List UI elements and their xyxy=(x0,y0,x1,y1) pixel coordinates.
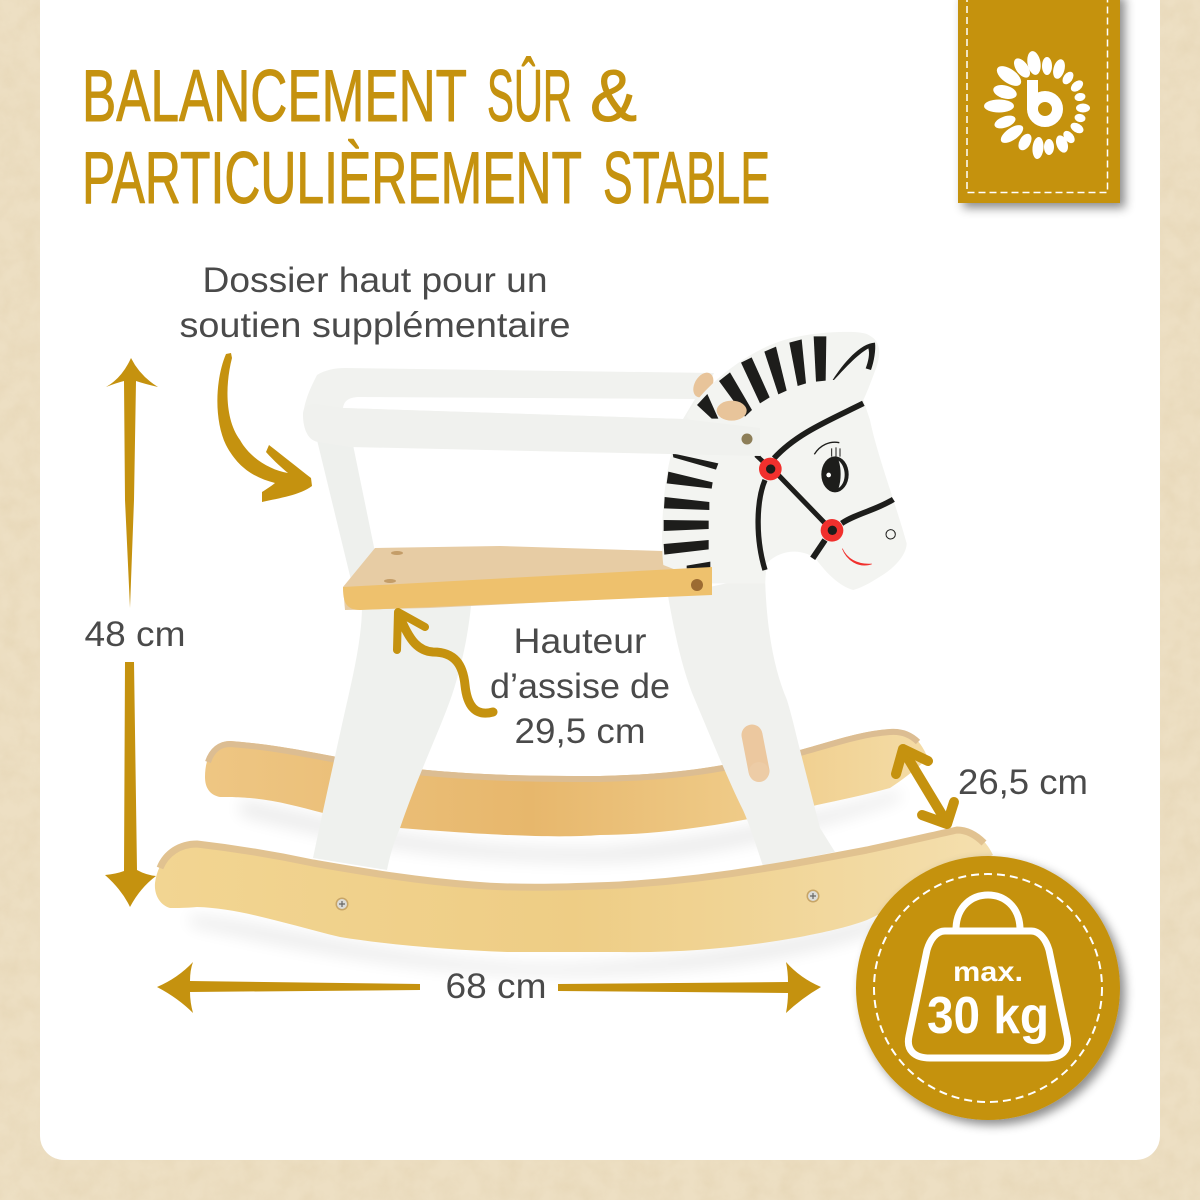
lower mane stripes xyxy=(664,453,718,568)
back rocker xyxy=(205,729,928,836)
badge text xyxy=(927,956,1049,1045)
label: backrest: soutien supplémentaire xyxy=(180,306,570,345)
head and mane shape xyxy=(662,332,907,590)
label: seat height: d’assise de xyxy=(490,667,670,706)
arrow: seat height curved xyxy=(397,612,493,713)
label: 68 cm: 68 cm xyxy=(446,967,546,1006)
back rocker top edge xyxy=(208,732,918,779)
mouth xyxy=(842,549,872,565)
eye xyxy=(814,442,849,492)
upper mane stripes xyxy=(697,336,826,419)
floor shadows xyxy=(190,790,900,975)
bolt xyxy=(742,434,752,444)
backrest upright xyxy=(317,440,375,584)
bridle xyxy=(756,403,893,570)
arrow: height upper xyxy=(106,358,158,608)
badge text: 30 kg xyxy=(927,987,1049,1045)
label: 48 cm: 48 cm xyxy=(84,615,186,654)
icon: sunflower logo xyxy=(984,50,1090,159)
rocking zebra product xyxy=(155,332,993,975)
front backrest rail xyxy=(303,404,760,456)
title: PARTICULIÈREMENT xyxy=(82,138,582,219)
rail gap xyxy=(343,397,695,419)
label: backrest xyxy=(180,261,570,345)
front rocker top edge xyxy=(160,830,984,887)
peg in front of mane xyxy=(717,401,747,421)
title: & xyxy=(590,56,637,137)
nostril xyxy=(886,530,895,539)
badge: max 30 kg xyxy=(856,856,1120,1120)
screw left xyxy=(336,898,348,910)
title: STABLE xyxy=(603,138,770,219)
title: SÛR xyxy=(487,56,572,137)
right leg xyxy=(668,575,835,866)
logo label xyxy=(958,0,1120,203)
label: 26,5 cm: 26,5 cm xyxy=(958,763,1088,802)
arrow: height lower xyxy=(105,662,156,907)
arrow: length left xyxy=(157,962,420,1013)
icon: weight outline xyxy=(908,895,1068,1058)
seat front edge xyxy=(343,567,712,610)
zebra head xyxy=(662,332,907,590)
seat holes xyxy=(384,551,403,583)
arrow: width diagonal xyxy=(896,749,954,824)
dowel peg xyxy=(749,735,769,782)
seat top xyxy=(343,546,712,610)
left leg xyxy=(313,606,471,870)
screw right xyxy=(806,890,820,902)
seat hole xyxy=(691,579,703,591)
label: seat height xyxy=(490,622,670,751)
label: backrest: Dossier haut pour un xyxy=(202,261,548,300)
label: seat height: 29,5 cm xyxy=(514,712,646,751)
arrow: backrest curved xyxy=(217,353,312,502)
arrow: length right xyxy=(558,962,821,1013)
ear xyxy=(833,343,875,380)
front rocker xyxy=(155,827,993,952)
title xyxy=(82,56,770,219)
title: BALANCEMENT xyxy=(82,56,467,137)
peg behind head xyxy=(689,369,718,401)
label: seat height: Hauteur xyxy=(514,622,647,661)
backrest top rail xyxy=(303,368,714,432)
bridle rings xyxy=(759,458,843,542)
badge text: max. xyxy=(953,956,1023,987)
